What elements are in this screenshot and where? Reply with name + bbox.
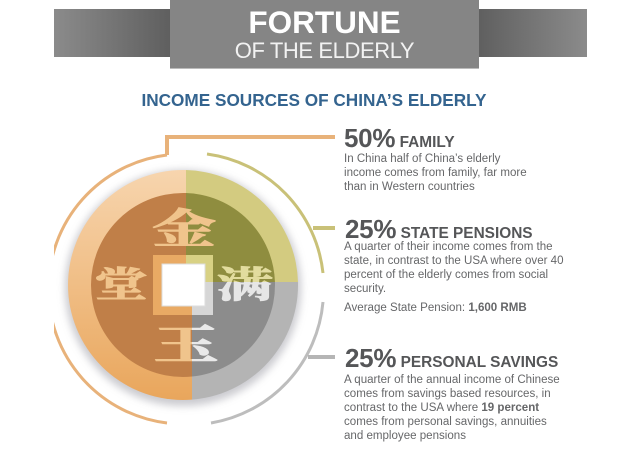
character: yu right: 玉 xyxy=(153,312,219,371)
coin rim quadrants xyxy=(68,170,298,400)
family text: In China half of China’s elderly xyxy=(344,153,500,165)
state pensions text: state, in contrast to the USA where over 40 xyxy=(344,255,564,267)
state pensions heading: 25% STATE PENSIONS xyxy=(345,214,533,244)
state pensions text xyxy=(344,241,564,295)
section heading: INCOME SOURCES OF CHINA’S ELDERLY xyxy=(141,90,487,110)
olive arc and connector xyxy=(207,154,335,273)
average state pension: Average State Pension: 1,600 RMB xyxy=(344,302,527,314)
character: man top: 满 xyxy=(217,256,273,308)
header band xyxy=(54,9,587,57)
personal savings text: comes from savings based resources, in xyxy=(344,388,551,400)
family text xyxy=(344,153,527,193)
title: fortune: FORTUNE xyxy=(248,4,401,40)
chinese characters xyxy=(96,207,273,362)
character: yu left: 玉 xyxy=(153,312,219,371)
gray arc and connector xyxy=(211,302,335,423)
subtitle: OF THE ELDERLY xyxy=(235,38,414,63)
personal savings text: contrast to the USA where 19 percent xyxy=(344,402,539,414)
family text: than in Western countries xyxy=(344,181,475,193)
character: tang: 堂 xyxy=(95,257,147,307)
family heading: 50% FAMILY xyxy=(344,123,455,153)
gold arc and connector xyxy=(48,137,335,423)
personal savings heading: 25% PERSONAL SAVINGS xyxy=(345,343,558,373)
personal savings text: comes from personal savings, annuities xyxy=(344,416,547,428)
left ribbon xyxy=(54,9,170,57)
character: man bottom: 满 xyxy=(217,256,273,308)
coin xyxy=(65,170,301,406)
personal savings text: and employee pensions xyxy=(344,430,466,442)
block: state pensions xyxy=(344,214,564,314)
state pensions text: security. xyxy=(344,283,386,295)
personal savings text: A quarter of the annual income of Chinese xyxy=(344,374,560,386)
block: family xyxy=(344,123,527,193)
coin face quadrants xyxy=(91,193,275,377)
personal savings text xyxy=(344,374,560,442)
state pensions text: A quarter of their income comes from the xyxy=(344,241,553,253)
state pensions text: percent of the elderly comes from social xyxy=(344,269,548,281)
coin graphic xyxy=(54,135,335,424)
title panel xyxy=(170,0,479,69)
family text: income comes from family, far more xyxy=(344,167,527,179)
right ribbon xyxy=(478,9,587,57)
block: personal savings xyxy=(344,343,560,442)
character: jin: 金 xyxy=(152,196,216,255)
square hole xyxy=(153,255,213,315)
